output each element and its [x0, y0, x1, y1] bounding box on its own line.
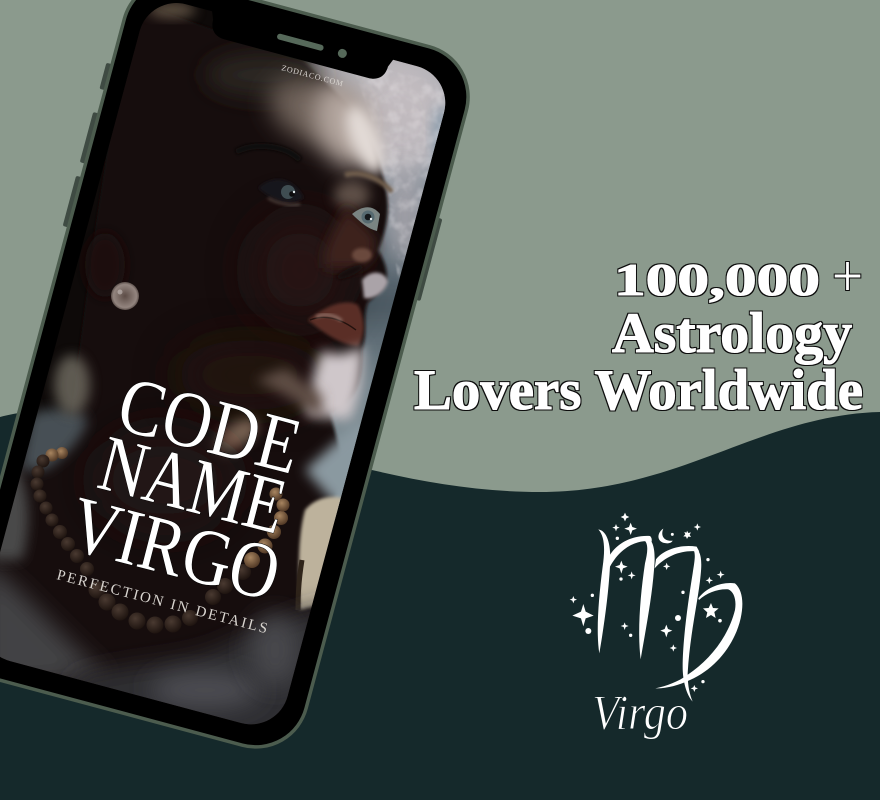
dots: [585, 533, 722, 683]
glyph first arch: [609, 536, 652, 567]
hair and wall on left: [20, 409, 88, 470]
website label on screen: ZODIACO.COM: [280, 63, 345, 88]
glyph second arch: [655, 546, 699, 568]
backdrop behind chin: [300, 421, 362, 508]
notch camera: [337, 48, 348, 59]
eye socket and nose bridge: [334, 181, 370, 209]
glyph second stem: [639, 537, 655, 659]
poster title: CODE NAME VIRGO: CODE: [109, 360, 310, 491]
notch speaker: [276, 33, 324, 51]
hair highlight top left: [148, 2, 196, 18]
neck highlight: [209, 412, 263, 460]
icon label: Virgo script: Virgo: [592, 684, 688, 740]
right brow: [345, 174, 392, 192]
right eye: [352, 207, 380, 231]
stars: [570, 513, 725, 692]
ear and earring: [85, 233, 139, 310]
head silhouette: [80, 20, 390, 528]
lit forehead: [259, 65, 371, 159]
hair fine glow: [205, 53, 325, 97]
phone mockup: [0, 0, 500, 780]
phone screen photo: woman in profile with pearls: [0, 3, 446, 724]
left brow: [236, 146, 300, 160]
headline line 1: 100,000: [614, 255, 820, 305]
lips: [308, 302, 364, 346]
icon: Virgo zodiac symbol with stars: [570, 513, 742, 702]
headline plus sign: +: [832, 243, 863, 309]
pearl necklace: [30, 447, 290, 634]
poster title: CODE NAME VIRGO: NAME: [90, 419, 295, 551]
clothing drapes: [0, 564, 104, 682]
headline: audience count: [414, 243, 863, 422]
headline line 2: Astrology: [612, 302, 852, 365]
glyph third stem and tail: [683, 547, 701, 702]
nostril and cheek highlight: [337, 264, 364, 278]
photo backdrop: [302, 60, 446, 524]
crescent moon: [658, 529, 673, 543]
phone notch: [205, 9, 394, 83]
poster tagline: PERFECTION IN DETAILS: [55, 567, 269, 637]
glyph first stem: [598, 529, 610, 653]
left eye: [258, 179, 304, 205]
poster title: CODE NAME VIRGO: VIRGO: [61, 480, 289, 619]
poster title: CODE NAME VIRGO: [61, 360, 310, 619]
background: dark teal wave: [0, 410, 880, 800]
headline line 3: Lovers Worldwide: [414, 359, 863, 422]
phone body: [0, 0, 480, 759]
glyph loop: [655, 583, 742, 688]
warm cheek glow: [250, 215, 350, 325]
pale sleeve at right: [296, 495, 341, 612]
lit chin: [306, 345, 363, 420]
phone side buttons: [63, 63, 459, 320]
textured backdrop mottling: [356, 70, 445, 278]
